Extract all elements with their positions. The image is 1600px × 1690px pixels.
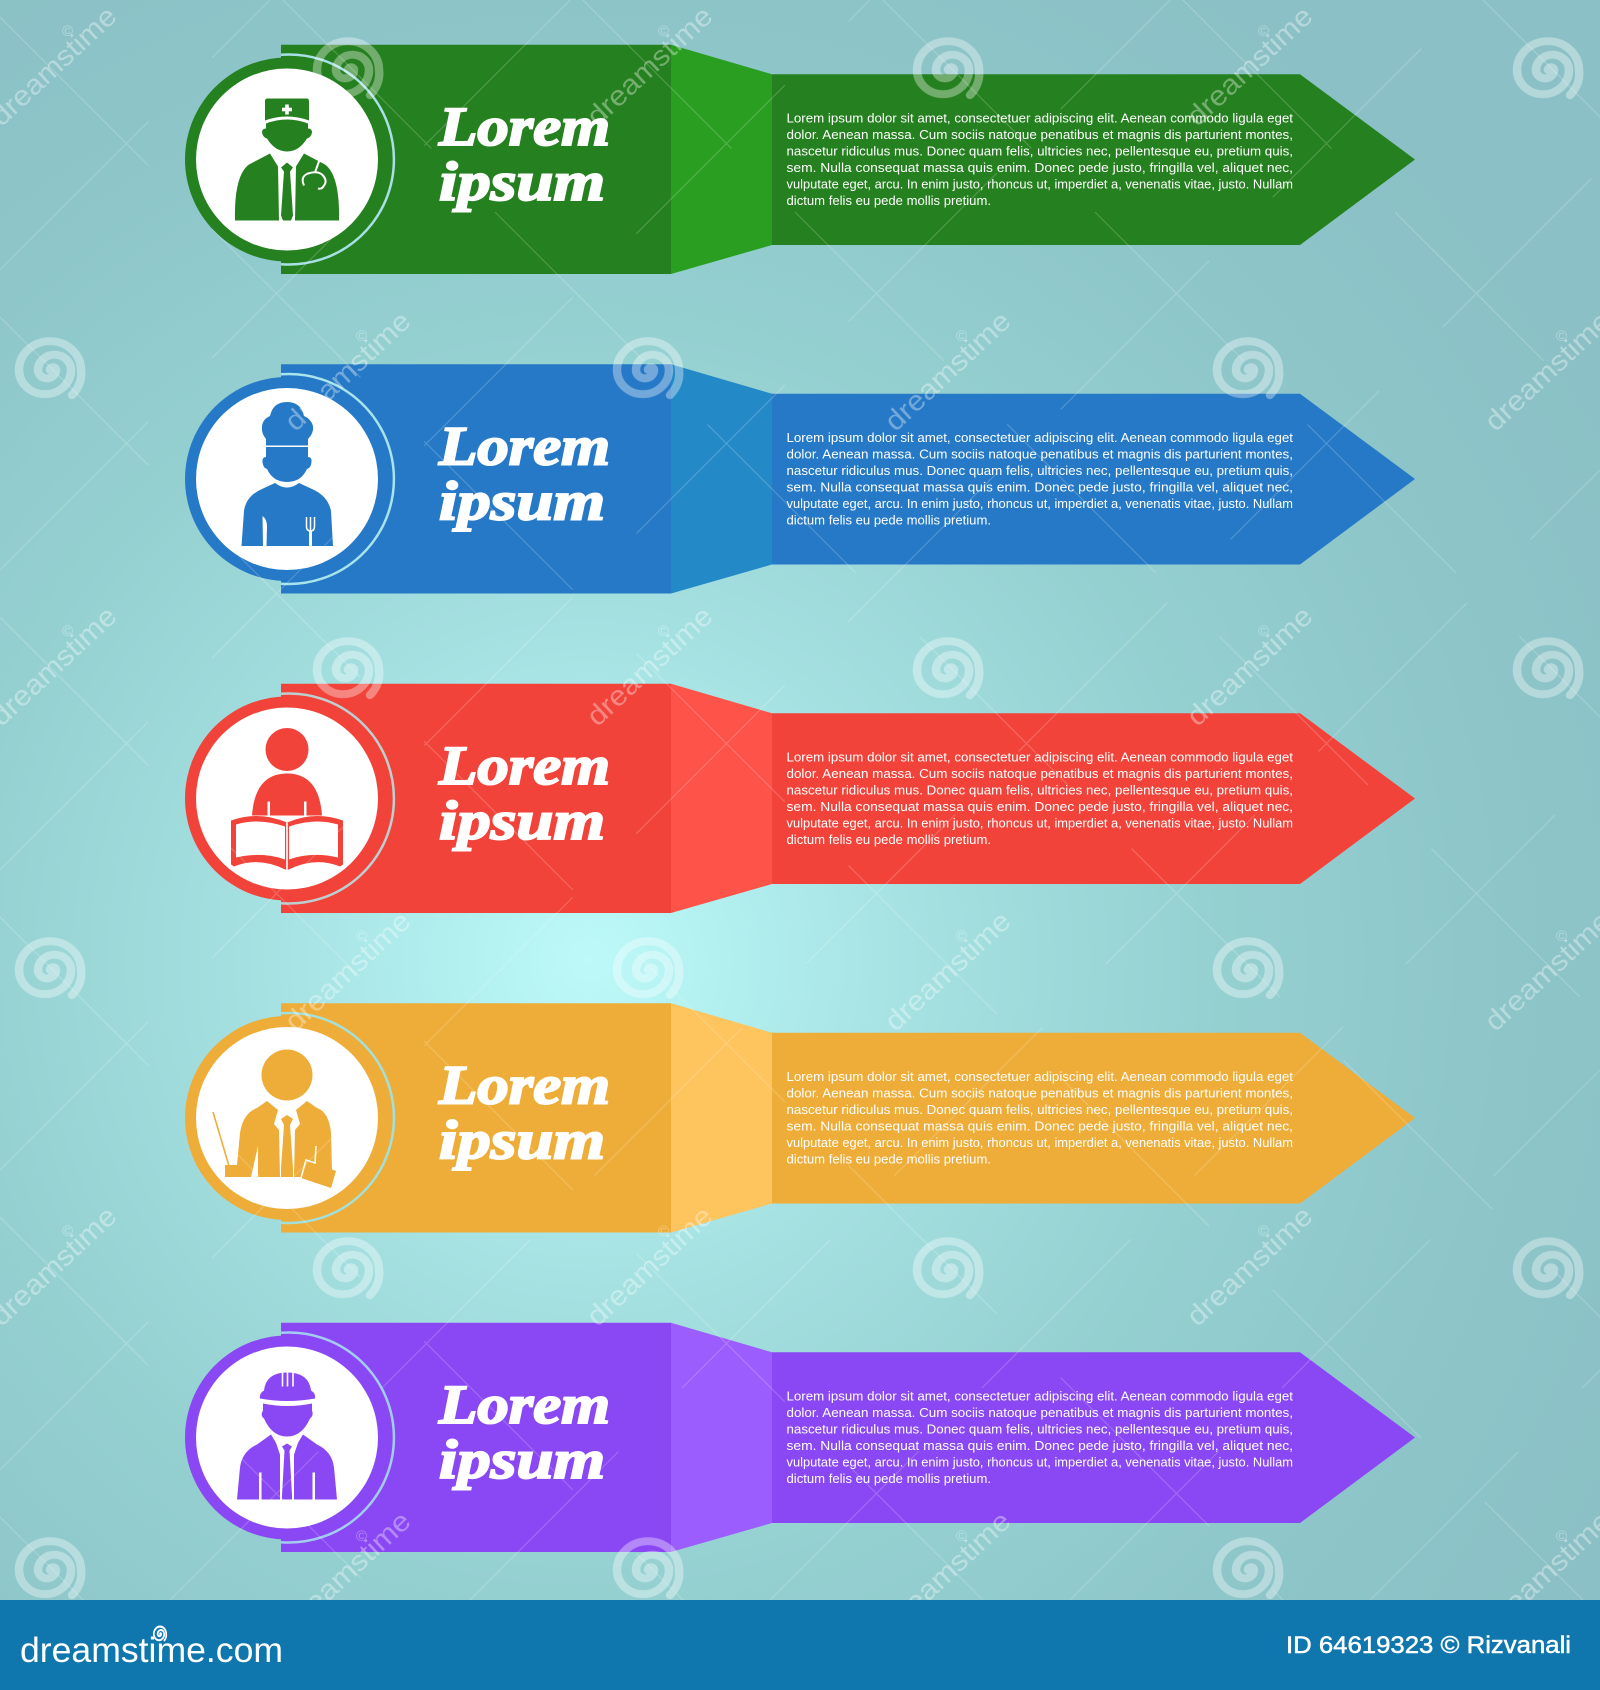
heading xyxy=(438,1054,610,1170)
watermark overlay lines, spirals and text: © xyxy=(1258,23,1269,40)
band: title ribbon xyxy=(281,1323,671,1552)
text block: nascetur ridiculus mus. Donec quam felis, ultricies nec, pellentesque eu, pretium quis, xyxy=(786,782,1293,797)
heading: ipsum xyxy=(439,1429,605,1490)
watermark overlay lines, spirals and text: © xyxy=(956,928,967,945)
text block: vulputate eget, arcu. In enim justo, rhoncus ut, imperdiet a, venenatis vitae, justo. Nullam xyxy=(786,176,1293,191)
panel: row 4 orange teacher xyxy=(185,1003,1415,1232)
text block: Lorem ipsum dolor sit amet, consectetuer adipiscing elit. Aenean commodo ligula eget xyxy=(786,1388,1293,1403)
text block: nascetur ridiculus mus. Donec quam felis, ultricies nec, pellentesque eu, pretium quis, xyxy=(786,463,1293,478)
icon: circle badge xyxy=(185,374,394,584)
text block: vulputate eget, arcu. In enim justo, rhoncus ut, imperdiet a, venenatis vitae, justo. Nullam xyxy=(786,496,1293,511)
watermark overlay lines, spirals and text: © xyxy=(1556,328,1567,345)
watermark overlay lines, spirals and text: dreamstime xyxy=(878,905,1017,1037)
watermark overlay lines, spirals and text: © xyxy=(356,328,367,345)
text block: Lorem ipsum dolor sit amet, consectetuer adipiscing elit. Aenean commodo ligula eget xyxy=(786,110,1293,125)
footer bar xyxy=(0,1600,1600,1690)
heading xyxy=(438,735,610,851)
text block: dolor. Aenean massa. Cum sociis natoque penatibus et magnis dis parturient montes, xyxy=(786,127,1293,142)
panel: row 5 purple engineer xyxy=(185,1323,1415,1552)
watermark overlay lines, spirals and text: dreamstime xyxy=(580,600,719,732)
text block: dictum felis eu pede mollis pretium. xyxy=(786,193,991,208)
text block: vulputate eget, arcu. In enim justo, rhoncus ut, imperdiet a, venenatis vitae, justo. Nullam xyxy=(786,815,1293,830)
text block: sem. Nulla consequat massa quis enim. Donec pede justo, fringilla vel, aliquet nec, xyxy=(786,160,1293,175)
icon: chef xyxy=(242,402,333,546)
icon: circle badge xyxy=(185,1332,394,1542)
text block xyxy=(786,749,1293,847)
icon: teacher with pointer xyxy=(213,1050,336,1188)
text block: sem. Nulla consequat massa quis enim. Donec pede justo, fringilla vel, aliquet nec, xyxy=(786,1438,1293,1453)
icon: doctor xyxy=(235,98,339,220)
watermark overlay lines, spirals and text: © xyxy=(658,23,669,40)
watermark overlay lines, spirals and text: © xyxy=(1258,1223,1269,1240)
text block: Lorem ipsum dolor sit amet, consectetuer adipiscing elit. Aenean commodo ligula eget xyxy=(786,430,1293,445)
watermark overlay lines, spirals and text: © xyxy=(1556,1528,1567,1545)
watermark overlay lines, spirals and text: © xyxy=(62,623,73,640)
text block: Lorem ipsum dolor sit amet, consectetuer adipiscing elit. Aenean commodo ligula eget xyxy=(786,749,1293,764)
heading: Lorem xyxy=(438,735,610,796)
text block: dictum felis eu pede mollis pretium. xyxy=(786,1151,991,1166)
heading: Lorem xyxy=(438,1374,610,1435)
watermark overlay lines, spirals and text: dreamstime xyxy=(278,305,417,437)
band: fold xyxy=(671,1003,772,1232)
footer logo text: dreamstime.com xyxy=(20,1631,283,1670)
text block: dolor. Aenean massa. Cum sociis natoque penatibus et magnis dis parturient montes, xyxy=(786,1405,1293,1420)
watermark overlay lines, spirals and text: dreamstime xyxy=(1180,600,1319,732)
heading xyxy=(438,1374,610,1490)
watermark overlay lines, spirals and text: dreamstime xyxy=(580,0,719,132)
text block: nascetur ridiculus mus. Donec quam felis, ultricies nec, pellentesque eu, pretium quis, xyxy=(786,1102,1293,1117)
text block xyxy=(786,430,1293,527)
footer image id credit: ID 64619323 © Rizvanali xyxy=(1286,1632,1571,1659)
icon: circle badge xyxy=(185,55,394,265)
arrow: text body xyxy=(772,1033,1415,1204)
panel: row 2 blue chef xyxy=(185,364,1415,594)
text block xyxy=(786,110,1293,208)
text block: dictum felis eu pede mollis pretium. xyxy=(786,832,991,847)
text block xyxy=(786,1388,1293,1486)
band: fold xyxy=(671,364,772,594)
watermark overlay lines, spirals and text: © xyxy=(356,928,367,945)
text block: sem. Nulla consequat massa quis enim. Donec pede justo, fringilla vel, aliquet nec, xyxy=(786,1118,1293,1133)
watermark overlay lines, spirals and text: © xyxy=(1556,928,1567,945)
heading: ipsum xyxy=(439,790,605,851)
text block xyxy=(786,1069,1293,1166)
watermark overlay lines, spirals and text: dreamstime xyxy=(278,1505,417,1637)
text block: dictum felis eu pede mollis pretium. xyxy=(786,1471,991,1486)
text block: Lorem ipsum dolor sit amet, consectetuer adipiscing elit. Aenean commodo ligula eget xyxy=(786,1069,1293,1084)
text block: sem. Nulla consequat massa quis enim. Donec pede justo, fringilla vel, aliquet nec, xyxy=(786,799,1293,814)
watermark overlay lines, spirals and text: © xyxy=(356,1528,367,1545)
heading xyxy=(438,416,610,532)
watermark overlay lines, spirals and text: © xyxy=(956,328,967,345)
band: fold xyxy=(671,45,772,274)
heading: ipsum xyxy=(439,470,605,532)
icon: engineer with helmet xyxy=(237,1372,337,1500)
text block: dictum felis eu pede mollis pretium. xyxy=(786,512,991,527)
watermark overlay lines, spirals and text: © xyxy=(62,1223,73,1240)
watermark overlay lines, spirals and text: dreamstime xyxy=(1180,1200,1319,1332)
band: fold xyxy=(671,684,772,913)
arrow: text body xyxy=(772,713,1415,884)
watermark overlay lines, spirals and text: dreamstime xyxy=(1180,0,1319,132)
icon: circle badge xyxy=(185,694,394,904)
arrow: text body xyxy=(772,74,1415,245)
watermark overlay lines, spirals and text: © xyxy=(62,23,73,40)
panel: row 1 green doctor xyxy=(185,45,1415,274)
band: title ribbon xyxy=(281,45,671,274)
heading xyxy=(438,96,610,212)
watermark overlay lines, spirals and text: dreamstime xyxy=(878,305,1017,437)
text block: nascetur ridiculus mus. Donec quam felis, ultricies nec, pellentesque eu, pretium quis, xyxy=(786,143,1293,158)
watermark overlay lines, spirals and text: dreamstime xyxy=(878,1505,1017,1637)
text block: dolor. Aenean massa. Cum sociis natoque penatibus et magnis dis parturient montes, xyxy=(786,766,1293,781)
heading: Lorem xyxy=(438,96,610,157)
watermark overlay lines, spirals and text: © xyxy=(1258,623,1269,640)
heading: Lorem xyxy=(438,1054,610,1116)
watermark overlay lines, spirals and text: dreamstime xyxy=(580,1200,719,1332)
watermark overlay lines, spirals and text: © xyxy=(658,1223,669,1240)
panel: row 3 red reader xyxy=(185,684,1415,913)
heading: ipsum xyxy=(439,1110,605,1170)
heading: ipsum xyxy=(439,151,605,212)
text block: vulputate eget, arcu. In enim justo, rhoncus ut, imperdiet a, venenatis vitae, justo. Nullam xyxy=(786,1454,1293,1469)
text block: sem. Nulla consequat massa quis enim. Donec pede justo, fringilla vel, aliquet nec, xyxy=(786,479,1293,494)
band: fold xyxy=(671,1323,772,1552)
band: title ribbon xyxy=(281,684,671,913)
icon: reader with book xyxy=(231,728,343,870)
icon: circle badge xyxy=(185,1013,394,1223)
heading: Lorem xyxy=(438,416,610,476)
band: title ribbon xyxy=(281,364,671,594)
text block: vulputate eget, arcu. In enim justo, rhoncus ut, imperdiet a, venenatis vitae, justo. Nullam xyxy=(786,1135,1293,1150)
text block: dolor. Aenean massa. Cum sociis natoque penatibus et magnis dis parturient montes, xyxy=(786,1085,1293,1100)
watermark overlay lines, spirals and text: © xyxy=(956,1528,967,1545)
watermark overlay lines, spirals and text: dreamstime xyxy=(278,905,417,1037)
text block: dolor. Aenean massa. Cum sociis natoque penatibus et magnis dis parturient montes, xyxy=(786,446,1293,461)
text block: nascetur ridiculus mus. Donec quam felis, ultricies nec, pellentesque eu, pretium quis, xyxy=(786,1421,1293,1436)
arrow: text body xyxy=(772,394,1415,564)
arrow: text body xyxy=(772,1352,1415,1523)
watermark overlay lines, spirals and text: © xyxy=(658,623,669,640)
band: title ribbon xyxy=(281,1003,671,1232)
